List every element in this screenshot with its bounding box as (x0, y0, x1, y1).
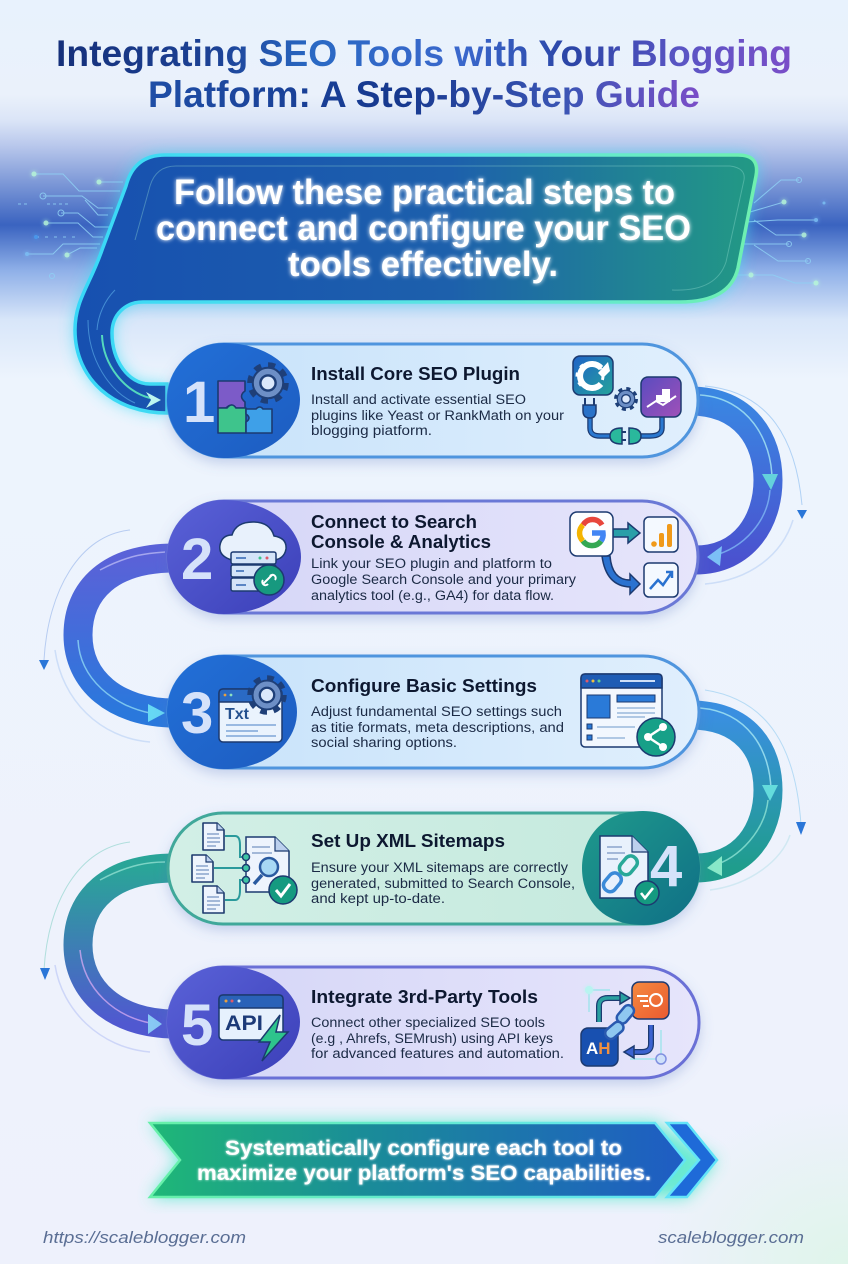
connector 2 to 3 (39, 530, 175, 742)
banner text: Follow these practical steps to (174, 173, 675, 212)
tool label: AH (586, 1039, 611, 1058)
connector 4 to 5 (40, 842, 175, 1052)
step 5 heading: Integrate 3rd-Party Tools (311, 987, 538, 1007)
step 5 body (311, 1015, 564, 1061)
tail arrow head (146, 392, 161, 408)
step 2 body: analytics tool (e.g., GA4) for data flow. (311, 588, 554, 603)
closing text: Systematically configure each tool to (225, 1137, 622, 1160)
step 2 heading: Connect to Search (311, 512, 477, 532)
step 1 body (311, 392, 565, 438)
step 5 number: 5 (181, 993, 213, 1058)
step 1 body: blogging piatform. (311, 423, 432, 438)
step 2 heading (311, 512, 491, 552)
connector 3 to 4 (690, 690, 806, 890)
step 2 body (311, 556, 576, 603)
step 4 body (311, 860, 575, 906)
arrow glow (150, 1122, 717, 1198)
step 4 number cap (582, 811, 700, 925)
step 5 body: Connect other specialized SEO tools (311, 1015, 545, 1030)
icon: API window (219, 995, 288, 1061)
closing text (197, 1137, 651, 1185)
banner text: connect and configure your SEO (156, 209, 691, 248)
step 1 pill (168, 344, 698, 457)
icon: plugin connection (573, 356, 681, 444)
icon: tool integrations (581, 982, 669, 1066)
step 3 body: Adjust fundamental SEO settings such (311, 704, 562, 719)
step 3 body: as titie formats, meta descriptions, and (311, 720, 564, 735)
title: Integrating SEO Tools with Your Blogging (56, 33, 792, 74)
step 3 body: social sharing options. (311, 735, 457, 750)
step 1 panel (167, 343, 698, 458)
banner body with tail (75, 155, 757, 413)
window label: API (225, 1012, 263, 1035)
closing text: maximize your platform's SEO capabilities. (197, 1162, 651, 1185)
footer url left: https://scaleblogger.com (43, 1228, 246, 1247)
step 2 heading: Console & Analytics (311, 532, 491, 552)
tail light streaks (88, 290, 150, 403)
step 2 number cap (167, 500, 301, 614)
footer url right: scaleblogger.com (658, 1228, 804, 1247)
window label: Txt (225, 706, 250, 723)
step 5 body: for advanced features and automation. (311, 1046, 564, 1061)
icon: text settings window (219, 679, 283, 742)
step 1 number cap (167, 343, 300, 458)
banner glow (75, 155, 757, 413)
step 5 pill (168, 967, 699, 1078)
banner inner line (135, 166, 744, 290)
arrow chevron (667, 1123, 717, 1197)
step 5 number cap (167, 966, 300, 1079)
icon: linked document (600, 836, 659, 905)
step 1 body: plugins like Yeast or RankMath on your (311, 408, 565, 423)
step 3 number: 3 (181, 681, 213, 746)
step 2 number: 2 (181, 527, 213, 592)
step 5 body: (e.g , Ahrefs, SEMrush) using API keys (311, 1031, 553, 1046)
step 2 panel (167, 500, 698, 614)
intro banner (75, 155, 757, 413)
banner text (156, 173, 691, 284)
title (56, 33, 792, 115)
title: Platform: A Step-by-Step Guide (148, 74, 700, 115)
circuit decoration right (724, 178, 826, 286)
connector 1 to 2 (690, 386, 807, 584)
step 2 pill (168, 501, 698, 613)
step 4 pill (168, 813, 699, 924)
icon: puzzle and gear (218, 366, 285, 433)
step 4 body: generated, submitted to Search Console, (311, 876, 575, 891)
step 4 number: 4 (650, 834, 682, 899)
step 3 heading: Configure Basic Settings (311, 676, 537, 696)
icon: Google analytics flow (570, 512, 678, 597)
step 4 panel (168, 811, 700, 925)
icon: browser with share (581, 674, 675, 756)
step 2 body: Link your SEO plugin and platform to (311, 556, 552, 571)
circuit decoration left (18, 172, 123, 278)
step 1 body: Install and activate essential SEO (311, 392, 526, 407)
step 1 number: 1 (183, 370, 215, 435)
step 2 body: Google Search Console and your primary (311, 572, 576, 587)
step 3 body (311, 704, 564, 750)
icon: sitemap search (192, 823, 297, 913)
step 4 body: and kept up-to-date. (311, 891, 445, 906)
step 5 panel (167, 966, 699, 1079)
step 4 body: Ensure your XML sitemaps are correctly (311, 860, 568, 875)
icon: cloud server (220, 522, 286, 595)
arrow body (150, 1123, 685, 1197)
banner text: tools effectively. (288, 245, 558, 284)
closing arrow banner (150, 1122, 717, 1198)
step 3 number cap (167, 655, 297, 769)
step 1 heading: Install Core SEO Plugin (311, 364, 520, 384)
step 3 pill (168, 656, 699, 768)
step 3 panel (167, 655, 699, 769)
step 4 heading: Set Up XML Sitemaps (311, 831, 505, 851)
